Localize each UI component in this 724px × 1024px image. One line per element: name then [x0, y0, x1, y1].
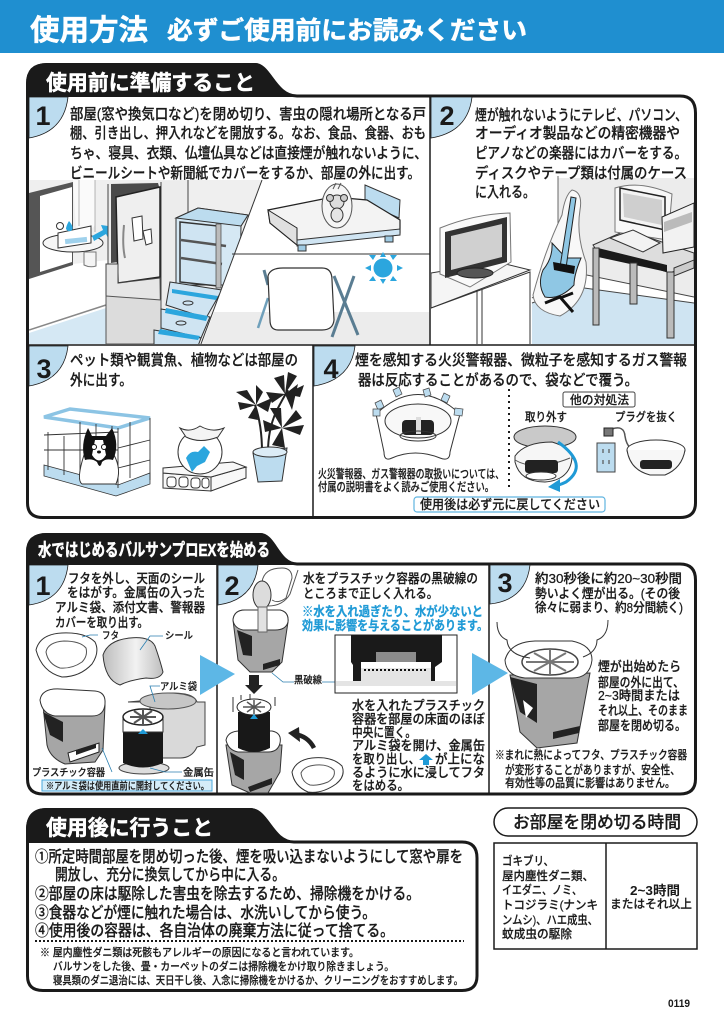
start step 3 text: 勢いよく煙が出る。(その後: [535, 586, 680, 601]
table: sealing time: ンムシ)、ハエ成虫、: [502, 912, 598, 927]
after use notes: 寝具類のダニ退治には、天日干し後、入念に掃除機をかけるか、クリーニングをおすすめします。: [53, 973, 463, 987]
notice: restore after use: 使用後は必ず元に戻してください: [420, 497, 600, 512]
detail diagram: water line: [335, 635, 457, 693]
after use notes: バルサンをした後、畳・カーペットのダニは掃除機をかけ取り除きましょう。: [53, 959, 394, 973]
guitar: [533, 190, 586, 316]
cage with dog: [44, 409, 150, 496]
start step 1 text: フタを外し、天面のシール: [68, 571, 205, 586]
panel: after use: [26, 808, 477, 990]
badge: start step 3: 3: [497, 568, 513, 598]
part labels: シール: [165, 631, 193, 642]
step 1 illustration: airing futon in the sun: [202, 252, 430, 344]
step 1 text: [70, 105, 427, 182]
title banner: [0, 0, 724, 53]
step 3 illustration: pets and plants: [44, 372, 304, 496]
start step 2 text: を取り出し、: [352, 752, 420, 766]
after use list: ③食器などが煙に触れた場合は、水洗いしてから使う。: [35, 903, 376, 922]
badge: start step 1: [29, 565, 68, 605]
caption: alarm manual: 付属の説明書をよく読みご使用ください。: [318, 479, 494, 494]
dotted divider: [508, 389, 510, 491]
labels: remove and unplug: プラグを抜く: [615, 409, 677, 424]
heading: after use: [26, 808, 294, 843]
start step 3 note: [495, 747, 687, 790]
start step 2 text: ※水を入れ過ぎたり、水が少ないと: [302, 604, 483, 619]
heading: start: [26, 533, 297, 565]
arrow: step 1 to 2: [200, 655, 235, 695]
after use notes: [40, 945, 463, 987]
start step 3 text: [535, 571, 688, 733]
badge: step 2: 2: [439, 101, 455, 131]
start step 2 text: が上にな: [435, 752, 485, 766]
badge: step 3: [29, 346, 68, 386]
notice: open bag: ※アルミ袋は使用直前に開封してください。: [46, 780, 209, 792]
part labels: アルミ袋: [160, 680, 197, 693]
table: sealing time: トコジラミ(ナンキ: [502, 898, 598, 912]
labels: remove and unplug: 取り外す: [525, 409, 567, 424]
illustration: metal can: [119, 709, 169, 774]
heading: before use: 使用前に準備すること: [46, 72, 255, 95]
step 1 illustration: room: [29, 180, 265, 346]
after use notes: ※ 屋内塵性ダニ類は死骸もアレルギーの原因になると言われています。: [40, 945, 359, 959]
arrow to fridge: [92, 225, 108, 241]
label: black dashed line: [272, 673, 352, 686]
label: other methods: 他の対処法: [570, 392, 629, 407]
start step 3 text: 煙が出始めたら: [598, 659, 681, 674]
potted plant: [236, 372, 304, 482]
badge: step 4: 4: [323, 354, 339, 384]
step 2 text: ピアノなどの楽器にはカバーをする。: [475, 145, 687, 162]
start step 2 text: 効果に影響を与えることがあります。: [302, 618, 488, 633]
after use list: ①所定時間部屋を閉め切った後、煙を吸い込まないようにして窓や扉を: [35, 848, 463, 866]
start step 2 text: アルミ袋を開け、金属缶: [352, 738, 485, 753]
start step 3 illustration: smoking container: [497, 620, 608, 748]
after use list: ②部屋の床は駆除した害虫を除去するため、掃除機をかける。: [35, 885, 420, 903]
table: sealing time: ゴキブリ、: [502, 853, 554, 868]
table: sealing time: またはそれ以上: [610, 897, 692, 911]
illustration: lid with curved arrow: [288, 727, 343, 792]
after use list: [35, 848, 463, 940]
step 3 text: ペット類や観賞魚、植物などは部屋の: [70, 351, 298, 369]
start step 3 text: 部屋を閉め切る。: [598, 718, 686, 733]
step 2 text: オーディオ製品などの精密機器や: [475, 124, 680, 142]
start step 2 text: ところまで正しく入れる。: [303, 586, 438, 601]
start step 2 text: をはめる。: [352, 778, 409, 793]
badge: step 4: [314, 346, 355, 386]
badge: start step 1: 1: [35, 571, 51, 601]
computer: [615, 185, 672, 240]
fridge: [108, 226, 111, 237]
after use list: 開放し、充分に換気してから中に入る。: [55, 866, 285, 884]
title banner: 必ずご使用前にお読みください: [167, 16, 527, 45]
goldfish bowl: [163, 426, 246, 491]
desk: [593, 230, 694, 273]
step 2 text: ディスクやテープ類は付属のケース: [475, 164, 687, 182]
start step 3 note: が変形することがありますが、安全性、: [505, 762, 680, 777]
badge: start step 2: 2: [224, 571, 240, 601]
start step 2 illustration: can into container: [226, 694, 282, 793]
part labels: プラスチック容器: [32, 766, 105, 779]
table: sealing time: 屋内塵性ダニ類、: [502, 868, 594, 883]
heading: start: 水ではじめるバルサンプロEXを始める: [38, 540, 270, 560]
step 4 illustration: covered detector: [373, 387, 463, 459]
start step 2 text: 水をプラスチック容器の黒破線の: [303, 571, 478, 586]
labels: remove and unplug: [525, 409, 677, 424]
start step 3 note: 有効性等の品質に影響はありません。: [505, 775, 675, 790]
start step 2 text: 容器を部屋の床面のほぼ: [352, 712, 485, 726]
start step 2 illustration: pouring water: [233, 568, 298, 694]
badge: step 1: [29, 97, 68, 138]
part labels: フタ: [102, 630, 119, 642]
start step 1 text: アルミ袋、添付文書、警報器: [55, 600, 205, 615]
illustration: removing detector: [514, 426, 576, 492]
start step 2 text: 中央に置く。: [352, 725, 416, 740]
start step 3 text: 2~3時間または: [598, 688, 680, 703]
title banner: 使用方法: [30, 14, 148, 47]
step 2 text: [475, 106, 687, 201]
step 1 illustration: bed with toy: [268, 183, 400, 251]
window: [29, 182, 73, 279]
step 1 text: 棚、引き出し、押入れなどを開放する。なお、食品、食器、おも: [70, 125, 426, 142]
step 1 text: ちゃ、寝具、衣類、仏壇仏具などは直接煙が触れないように、: [70, 144, 427, 162]
step 2 text: に入れる。: [475, 184, 535, 201]
table: sealing time: イエダニ、ノミ、: [502, 882, 582, 897]
step 1 text: ビニールシートや新聞紙でカバーをするか、部屋の外に出す。: [70, 165, 420, 182]
drawers: [166, 282, 222, 318]
illustration: plastic container: [40, 689, 105, 764]
step 3 text: 外に出す。: [70, 372, 132, 389]
illustration: outlet and plug: [597, 428, 685, 475]
step 4 text: 煙を感知する火災警報器、微粒子を感知するガス警報: [355, 351, 687, 369]
start step 2 text: るように水に浸してフタ: [352, 765, 485, 780]
heading: after use: 使用後に行うこと: [46, 817, 213, 840]
badge: step 3: 3: [36, 354, 52, 384]
step 1 text: 部屋(窓や換気口など)を閉め切り、害虫の隠れ場所となる戸: [70, 105, 426, 123]
start step 1 text: カバーを取り出す。: [55, 615, 148, 630]
illustration: lid: [36, 633, 97, 677]
table: sealing time: [494, 843, 697, 949]
badge: step 1: 1: [35, 101, 51, 131]
start step 3 text: 約30秒後に約20~30秒間: [535, 571, 682, 586]
start step 3 text: 徐々に弱まり、約8分間続く): [535, 600, 683, 615]
part labels: 金属缶: [183, 766, 214, 779]
illustration: seal: [103, 638, 163, 685]
heading: before use: [26, 63, 297, 97]
badge: start step 2: [218, 565, 258, 605]
table: sealing time: 蚊成虫の駆除: [502, 926, 572, 941]
step 3 text: [70, 351, 298, 389]
panel: before use: [26, 63, 696, 518]
start step 2 text: [302, 571, 488, 793]
caption: alarm manual: [318, 466, 504, 494]
start step 3 text: 部屋の外に出て、: [598, 675, 684, 690]
arrow: step 2 to 3: [472, 653, 508, 695]
step 2 illustration: covered electronics: [431, 176, 694, 344]
table: sealing time: 2~3時間: [630, 883, 680, 898]
part labels: [32, 630, 214, 779]
panel: starting the product: [26, 533, 696, 794]
start step 1 text: をはがす。金属缶の入った: [67, 585, 205, 600]
code number: 0119: [668, 998, 690, 1010]
step 4 text: [355, 351, 687, 389]
step 4 text: 器は反応することがあるので、袋などで覆う。: [358, 371, 638, 389]
start step 2 text: 水を入れたプラスチック: [352, 698, 485, 713]
caption: alarm manual: 火災警報器、ガス警報器の取扱いについては、: [318, 466, 504, 481]
after use list: ④使用後の容器は、各自治体の廃棄方法に従って捨てる。: [35, 922, 394, 940]
badge: step 2: [431, 97, 472, 138]
badge: start step 3: [490, 565, 530, 604]
dividers: panel 1: [27, 97, 696, 518]
label: black dashed line: 黒破線: [294, 674, 322, 686]
start step 3 text: それ以上、そのまま: [598, 703, 688, 718]
heading: sealing time: お部屋を閉め切る時間: [513, 813, 681, 832]
heading: sealing time: [494, 808, 697, 836]
illustration: aluminium bag: [128, 693, 205, 758]
side table with box: [43, 234, 103, 252]
cupboard: [176, 208, 248, 285]
start step 1 text: [55, 571, 205, 630]
